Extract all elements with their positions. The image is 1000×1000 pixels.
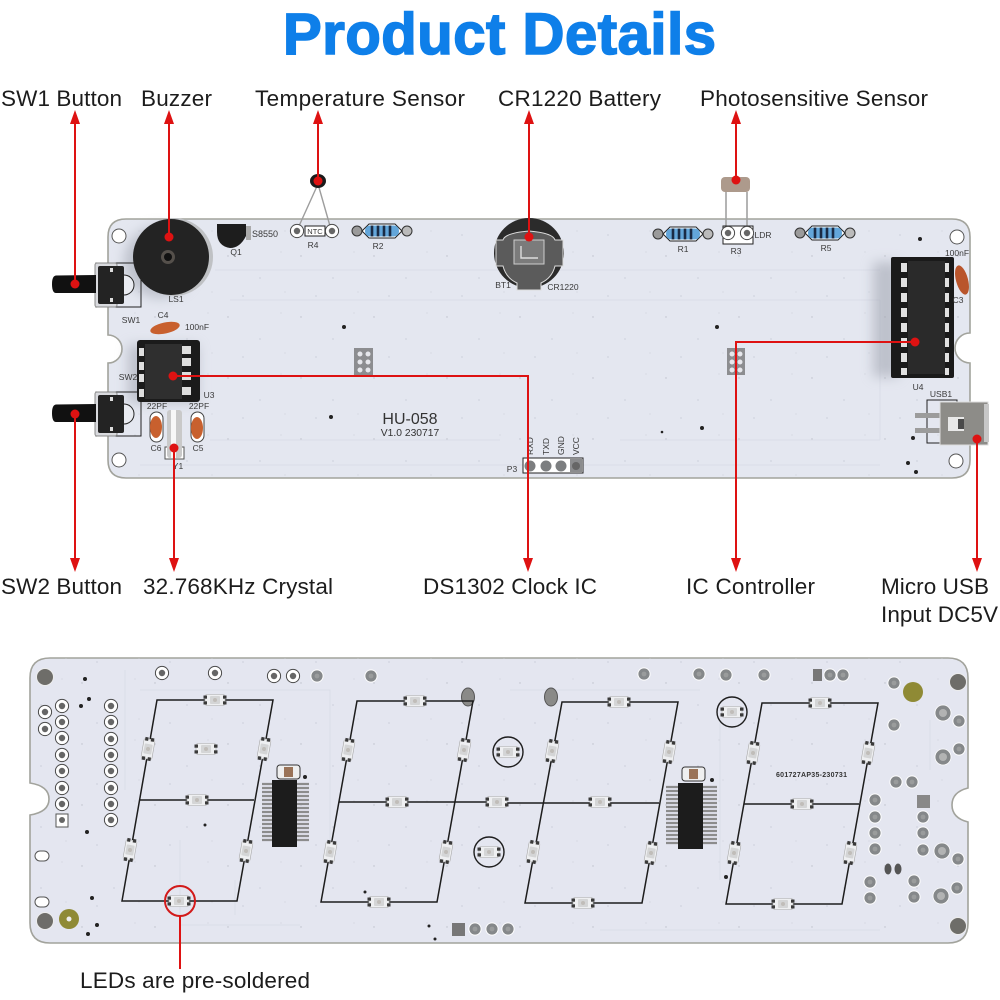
resistor R1 [653, 227, 713, 241]
callout: Photosensitive Sensor: Photosensitive Sensor [700, 86, 928, 111]
callout: CR1220 Battery: CR1220 Battery [498, 86, 662, 111]
digit 3 segments [490, 702, 678, 903]
capacitor C6 [150, 412, 163, 442]
buzzer [133, 218, 213, 296]
callout: SW1 Button: SW1 Button [1, 86, 122, 111]
silkscreen labels: SW1 [122, 315, 140, 325]
silkscreen labels: Q1 [230, 247, 242, 257]
SW1 button [52, 263, 141, 307]
capacitor C5 [191, 412, 204, 442]
silkscreen labels: R4 [308, 240, 319, 250]
callout: SW2 Button [1, 410, 122, 599]
NTC thermistor R4 [290, 174, 339, 238]
component shadows [124, 226, 899, 403]
callout: 32.768KHz Crystal: 32.768KHz Crystal [143, 574, 333, 599]
silkscreen labels: R1 [678, 244, 689, 254]
P3 header [523, 458, 583, 473]
LEDs digit 2 [323, 696, 471, 908]
micro USB connector [915, 400, 989, 445]
transistor Q1 [217, 224, 251, 248]
silkscreen labels: S8550 [252, 229, 278, 239]
silkscreen labels: V1.0 230717 [381, 428, 439, 439]
silkscreen labels: C4 [158, 310, 169, 320]
resistor R2 [352, 224, 412, 238]
silkscreen labels: VCC [571, 437, 581, 455]
silkscreen labels: USB1 [930, 389, 952, 399]
silkscreen labels: Y1 [173, 461, 183, 471]
callout: DS1302 Clock IC: DS1302 Clock IC [423, 574, 597, 599]
board serial number: 601727AP35-230731 [776, 772, 847, 779]
IC controller U4 in socket [891, 257, 954, 378]
callout: IC Controller: IC Controller [686, 574, 816, 599]
digit 4 segments [726, 703, 878, 904]
digit 2 segments [321, 701, 490, 902]
driver IC right [666, 767, 717, 849]
callout: 32.768KHz Crystal [143, 444, 333, 599]
silkscreen labels: LDR [754, 230, 772, 240]
callout: Temperature Sensor: Temperature Sensor [255, 86, 466, 111]
silkscreen labels: 100nF [185, 322, 209, 332]
silkscreen labels: C6 [151, 443, 162, 453]
board outline [108, 219, 970, 478]
silkscreen labels: RXD [525, 437, 535, 455]
silkscreen labels: LS1 [168, 294, 184, 304]
photoresistor LDR [721, 177, 754, 244]
panel: bottom PCB back side [30, 658, 968, 943]
SW2 button [52, 392, 141, 436]
callout: Photosensitive Sensor [700, 86, 928, 184]
capacitor C3 [952, 264, 972, 296]
silkscreen labels: 100nF [945, 248, 969, 258]
silkscreen labels: SW2 [119, 372, 137, 382]
silkscreen labels: 22PF [147, 401, 167, 411]
LEDs digit 4 [727, 698, 875, 910]
silkscreen labels: BT1 [495, 280, 511, 290]
silkscreen labels: R2 [373, 241, 384, 251]
gold pads [59, 682, 923, 929]
callout: Micro USB Input DC5V [881, 434, 998, 627]
crystal Y1 [165, 410, 184, 459]
pad cluster left [354, 348, 373, 375]
NTC thermistor R4: NTC [307, 227, 323, 236]
callout: Micro USB Input DC5V: Input DC5V [881, 602, 998, 627]
callout: SW1 Button [1, 86, 122, 288]
silkscreen labels: C3 [953, 295, 964, 305]
silkscreen labels: CR1220 [547, 282, 579, 292]
silkscreen labels: 22PF [189, 401, 209, 411]
silkscreen labels: GND [556, 436, 566, 455]
silkscreen labels: U4 [913, 382, 924, 392]
driver IC left [262, 765, 309, 847]
LEDs digit 3 [526, 696, 676, 908]
silkscreen labels: U3 [204, 390, 215, 400]
ovals [35, 688, 558, 907]
silkscreen labels: P3 [507, 464, 517, 474]
pad cluster right [727, 348, 745, 375]
LEDs digit 1 [123, 694, 271, 906]
silkscreen labels: C5 [193, 443, 204, 453]
callout: CR1220 Battery [498, 86, 662, 242]
callout: LEDs are pre-soldered [80, 886, 310, 993]
callout: LEDs are pre-soldered: LEDs are pre-soldered [80, 968, 310, 993]
board outline [30, 658, 968, 943]
callout: Buzzer [141, 86, 212, 242]
title: Product Details [283, 2, 716, 67]
resistor R5 [795, 226, 855, 240]
silkscreen labels: R3 [731, 246, 742, 256]
left through-hole columns [38, 666, 378, 827]
small vias [79, 677, 728, 940]
digit 1 segments [122, 700, 273, 901]
right pads [452, 667, 966, 936]
coin battery holder [494, 218, 564, 290]
callout: Buzzer: Buzzer [141, 86, 212, 111]
small vias [329, 237, 922, 474]
mounting holes [112, 229, 964, 468]
callout: SW2 Button: SW2 Button [1, 574, 122, 599]
silkscreen labels [119, 229, 969, 474]
LEDs colon and dots [478, 706, 744, 858]
capacitor C4 [149, 320, 181, 336]
callout: Temperature Sensor [255, 86, 466, 186]
callout: IC Controller [686, 338, 920, 599]
panel: top PCB front side [52, 174, 989, 478]
callout: DS1302 Clock IC [168, 372, 597, 599]
silkscreen labels: TXD [541, 438, 551, 455]
clock IC U3 in socket [137, 340, 200, 402]
callout: Micro USB Input DC5V: Micro USB [881, 574, 989, 599]
corner pads [36, 668, 966, 934]
silkscreen labels: HU-058 [382, 411, 438, 428]
circled indicator LEDs [474, 697, 747, 867]
silkscreen labels: R5 [821, 243, 832, 253]
